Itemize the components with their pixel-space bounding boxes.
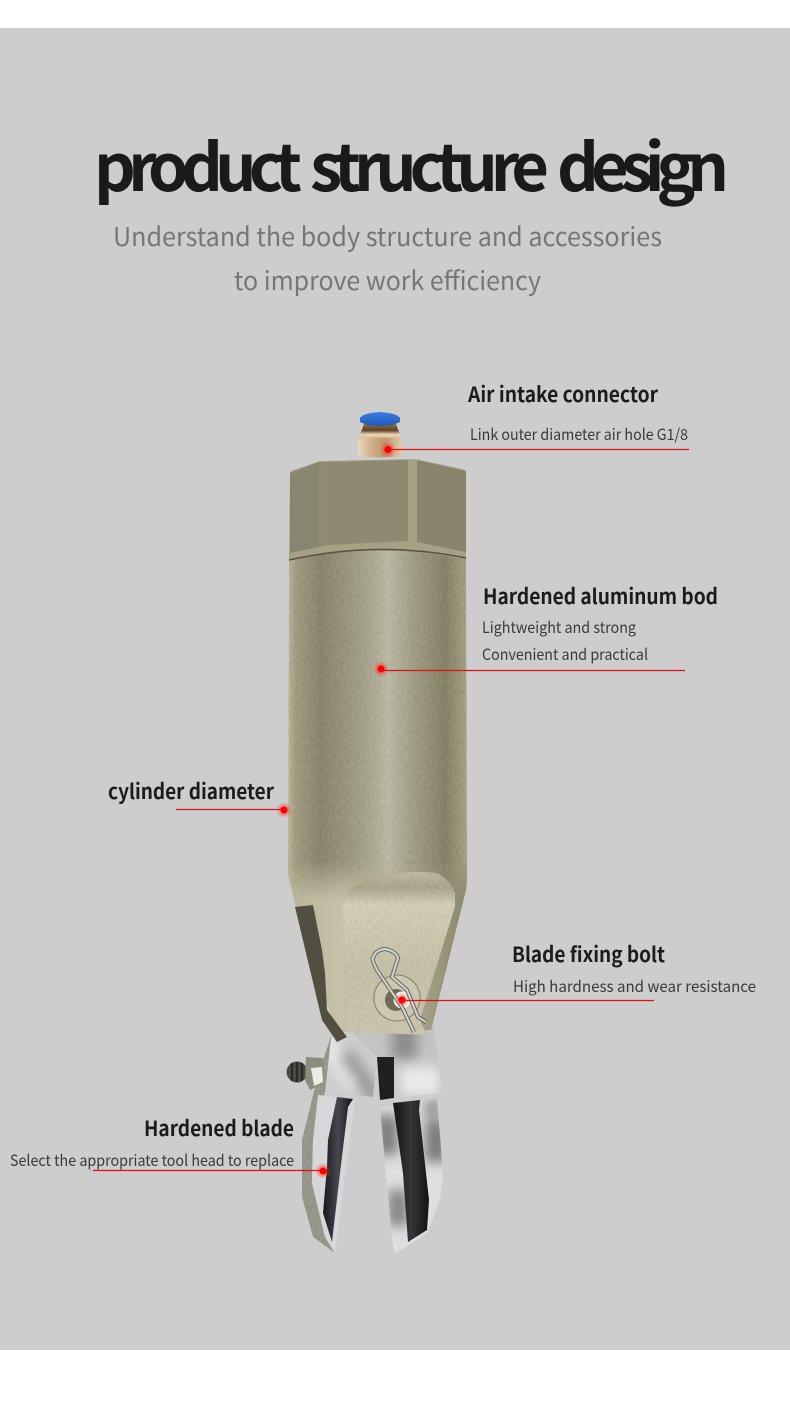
marker	[276, 802, 292, 818]
subtitle: to improve work efficiency	[234, 261, 541, 298]
description: Link outer diameter air hole G1/8	[470, 423, 688, 445]
callout: hardened aluminum body	[373, 581, 718, 677]
leader line	[176, 808, 284, 810]
title: structure	[310, 116, 549, 210]
product illustration: pneumatic shear	[286, 412, 467, 1260]
dark slot	[295, 905, 347, 1042]
left jaw head	[325, 1034, 376, 1097]
heading: Blade fixing bolt	[512, 939, 665, 969]
heading: cylinder diameter	[108, 776, 275, 806]
washer and bolt	[374, 975, 420, 1021]
description	[482, 616, 648, 665]
leader line	[93, 1170, 323, 1172]
right blade	[380, 1098, 443, 1254]
heading: Hardened blade	[144, 1113, 294, 1143]
marker	[395, 993, 409, 1007]
seam	[289, 549, 466, 560]
description: High hardness and wear resistance	[513, 975, 756, 997]
left blade	[312, 1095, 355, 1253]
retaining clip	[372, 949, 426, 1032]
description: Select the appropriate tool head to replace	[10, 1149, 294, 1171]
black block	[377, 1057, 394, 1100]
marker	[380, 442, 396, 458]
leader line	[381, 670, 685, 672]
title	[94, 116, 729, 210]
head plate	[342, 872, 455, 1035]
leader line	[388, 448, 689, 450]
leader line	[402, 1000, 654, 1002]
callout: air intake connector	[380, 379, 689, 458]
subtitle: Understand the body structure and accessories	[113, 217, 662, 254]
marker	[373, 661, 389, 677]
side nut and screw	[286, 1057, 324, 1090]
heading: Hardened aluminum bod	[483, 581, 718, 611]
title: product	[94, 116, 302, 210]
description: Lightweight and strong	[482, 616, 636, 638]
heading: Air intake connector	[467, 379, 659, 409]
marker	[315, 1163, 331, 1179]
cone highlight	[288, 860, 467, 1032]
callout: cylinder diameter	[108, 776, 292, 818]
title: design	[557, 116, 729, 210]
right jaw head	[352, 1022, 442, 1098]
air connector	[358, 412, 402, 458]
hex cap	[289, 459, 466, 560]
description: Convenient and practical	[482, 643, 648, 665]
callout: blade fixing bolt	[395, 939, 756, 1007]
left arm behind the body	[302, 1030, 340, 1253]
callout: hardened blade	[10, 1113, 331, 1179]
cylinder body	[288, 550, 467, 1032]
subtitle	[113, 217, 662, 298]
